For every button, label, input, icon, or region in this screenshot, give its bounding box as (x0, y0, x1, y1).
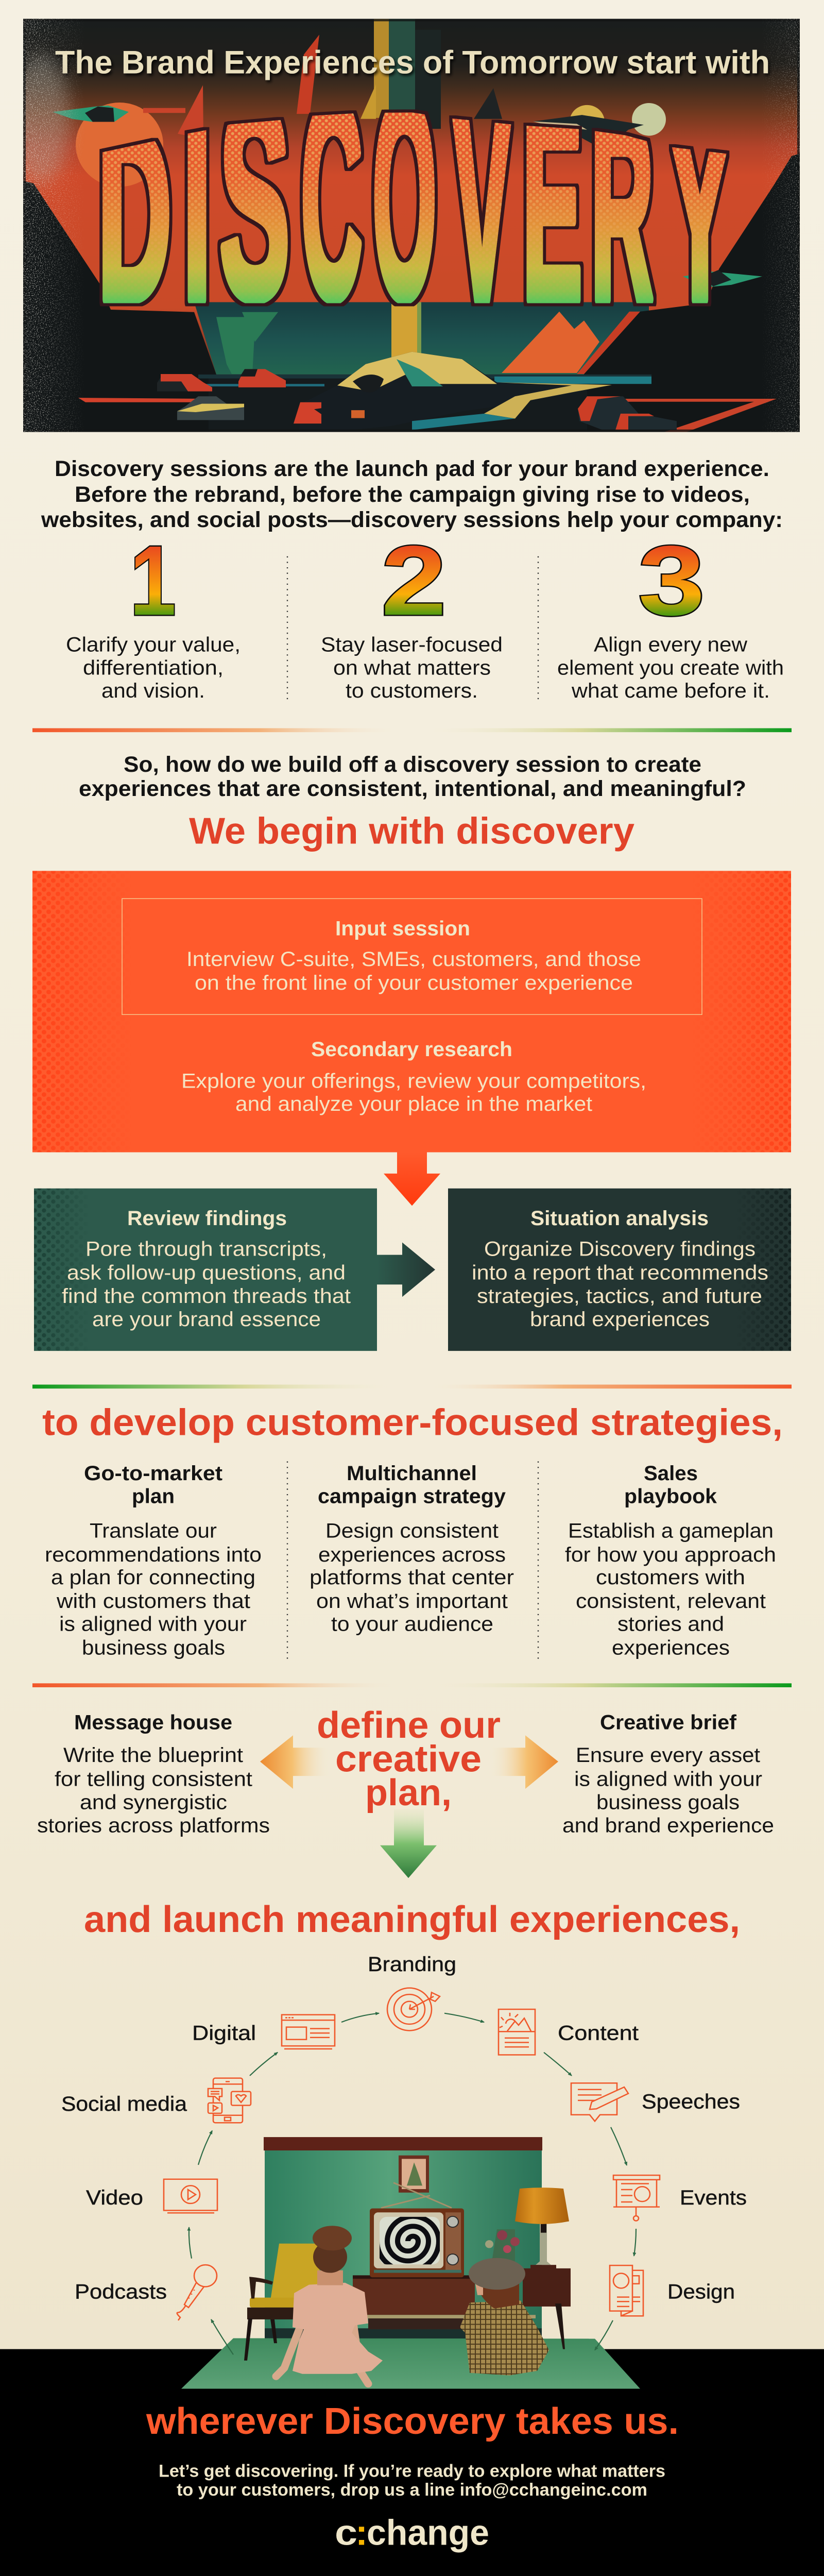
headline: The Brand Experiences of Tomorrow start with: The Brand Experiences of Tomorrow start with (55, 43, 770, 80)
experience cycle labels: Events (680, 2187, 747, 2209)
input session (186, 917, 641, 994)
distressed poster edges (13, 19, 800, 432)
crown molding (264, 2137, 542, 2150)
icon: events presentation board (613, 2175, 660, 2221)
benefit 3 text: element you create with (557, 656, 784, 679)
secondary research: Explore your offerings, review your competitors, (181, 1070, 646, 1092)
three benefits columns (66, 525, 784, 702)
panel: review findings (34, 1189, 377, 1351)
panel: situation analysis (448, 1189, 791, 1351)
multichannel campaign strategy: campaign strategy (318, 1485, 506, 1507)
benefit 1 text: differentiation, (83, 656, 224, 679)
panel: situation analysis: strategies, tactics, and future (477, 1285, 762, 1308)
experience cycle labels: Speeches (642, 2090, 740, 2113)
teal city below the lettering (194, 302, 649, 377)
panel: review findings: Pore through transcripts, (85, 1238, 327, 1260)
secondary research (181, 1038, 646, 1115)
experience cycle labels: Podcasts (75, 2280, 167, 2303)
benefit 1 text: and vision. (101, 680, 205, 702)
go-to-market plan: plan (132, 1485, 175, 1507)
benefit 3 text: what came before it. (571, 680, 770, 702)
benefit 2 text (321, 633, 503, 702)
icon: design brochure (610, 2265, 643, 2316)
flowers (485, 2229, 520, 2261)
living room collage (181, 2137, 640, 2389)
wall base shadow (265, 2328, 542, 2341)
secondary research: Secondary research (311, 1038, 512, 1061)
hero illustration poster (13, 19, 800, 432)
experience cycle labels (61, 1953, 747, 2303)
experience cycle labels: Digital (192, 2022, 256, 2044)
icon: digital browser (282, 2015, 335, 2049)
panel: situation analysis: Situation analysis (530, 1207, 709, 1230)
antenna (381, 2183, 452, 2208)
sun and moons (76, 103, 666, 187)
table lamp (515, 2188, 569, 2269)
heading: define our creative plan: define our (317, 1704, 501, 1746)
experience cycle labels: Social media (61, 2093, 187, 2115)
input session: on the front line of your customer experience (195, 972, 633, 994)
number 3: 3 (638, 525, 705, 636)
creative brief block: and brand experience (562, 1814, 774, 1837)
small spaceships (53, 106, 762, 287)
go-to-market plan: business goals (82, 1636, 225, 1659)
icon: speech with pencil (571, 2083, 628, 2121)
question text: So, how do we build off a discovery session to create (124, 753, 701, 777)
message house block: Write the blueprint (63, 1744, 243, 1767)
vintage television (370, 2209, 464, 2277)
heading: define our creative plan: plan, (365, 1771, 452, 1814)
logo: c:change: c (335, 2513, 357, 2552)
strategy columns (45, 1462, 776, 1659)
intro paragraph: Discovery sessions are the launch pad for your brand experience. (55, 457, 769, 481)
sales playbook: consistent, relevant (576, 1590, 766, 1613)
DISCOVERY gradient lettering: O (372, 39, 437, 359)
panel: review findings: ask follow-up questions, and (67, 1261, 346, 1284)
creative brief block (562, 1711, 774, 1837)
creative brief block: is aligned with your (574, 1768, 762, 1790)
sales playbook: for how you approach (565, 1543, 776, 1566)
intro paragraph: websites, and social posts—discovery sessions help your company: (41, 508, 783, 532)
logo: c:change: : (355, 2513, 368, 2552)
sales playbook (565, 1462, 776, 1659)
sales playbook: Establish a gameplan (568, 1519, 774, 1542)
lower cycle arrows over rug (211, 2319, 613, 2354)
spiral screen (377, 2216, 439, 2271)
go-to-market plan: with customers that (56, 1590, 250, 1613)
sales playbook: playbook (624, 1485, 717, 1507)
girl seated (276, 2226, 383, 2384)
black footer background (0, 2349, 824, 2576)
multichannel campaign strategy: to your audience (331, 1613, 493, 1635)
creative brief block: business goals (596, 1791, 740, 1814)
call to action (159, 2461, 665, 2500)
DISCOVERY gradient lettering: S (219, 47, 290, 357)
benefit 3 text (557, 633, 784, 702)
console cabinet (353, 2268, 571, 2349)
heading: to develop customer-focused strategies: to develop customer-focused strategies, (42, 1401, 783, 1443)
icon: video player (164, 2179, 217, 2213)
intro paragraph (41, 457, 783, 532)
heading: define our creative plan (317, 1704, 501, 1814)
message house block: and synergistic (80, 1791, 227, 1814)
sales playbook: experiences (612, 1636, 730, 1659)
multichannel campaign strategy: platforms that center (310, 1566, 514, 1589)
boy seated (460, 2258, 549, 2376)
heading: define our creative plan: creative (335, 1738, 482, 1780)
message house block (37, 1711, 270, 1837)
go-to-market plan: recommendations into (45, 1543, 262, 1566)
experience cycle labels: Content (558, 2022, 639, 2044)
experience cycle labels: Branding (368, 1953, 456, 1976)
question text (79, 753, 746, 801)
creative brief block: Ensure every asset (576, 1744, 760, 1767)
spaceship car (294, 352, 612, 432)
DISCOVERY gradient lettering (98, 39, 730, 359)
message house block: Message house (74, 1711, 232, 1734)
go-to-market plan (45, 1462, 262, 1659)
icon: social media phone (208, 2078, 251, 2123)
benefit 1 text: Clarify your value, (66, 633, 241, 656)
benefit 2 text: on what matters (333, 656, 491, 679)
sales playbook: stories and (617, 1613, 724, 1635)
question text: experiences that are consistent, intentional, and meaningful? (79, 777, 746, 801)
panel: review findings: are your brand essence (92, 1308, 321, 1331)
logo: c:change: change (367, 2513, 489, 2552)
panel: situation analysis: brand experiences (530, 1308, 710, 1331)
input session: Interview C-suite, SMEs, customers, and those (186, 948, 641, 971)
wall (265, 2150, 542, 2341)
panel: situation analysis: into a report that recommends (472, 1261, 768, 1284)
arrow: plan down to launch (380, 1809, 437, 1878)
benefit 2 text: Stay laser-focused (321, 633, 503, 656)
DISCOVERY gradient lettering: I (183, 62, 211, 355)
creative brief block: Creative brief (600, 1711, 737, 1734)
icon: branding target (387, 1988, 440, 2030)
road and red lines (78, 375, 777, 432)
go-to-market plan: a plan for connecting (51, 1566, 255, 1589)
DISCOVERY gradient lettering: D (98, 77, 171, 351)
secondary research: and analyze your place in the market (235, 1092, 592, 1115)
grass rug (181, 2338, 640, 2389)
cycle arrows (189, 2013, 636, 2259)
panel: discovery inputs (32, 871, 791, 1153)
number 2: 2 (381, 525, 447, 636)
sales playbook: Sales (644, 1462, 698, 1485)
experience cycle labels: Video (86, 2187, 143, 2209)
heading: We begin with discovery: We begin with discovery (189, 810, 634, 852)
small cars (157, 369, 677, 430)
yellow chair (244, 2244, 320, 2361)
intro paragraph: Before the rebrand, before the campaign giving rise to videos, (75, 483, 750, 507)
orange peaks and red edge (502, 312, 640, 374)
go-to-market plan: is aligned with your (59, 1613, 247, 1635)
arrow: plan to message house (260, 1735, 331, 1789)
heading: and launch meaningful experiences: and launch meaningful experiences, (84, 1898, 740, 1940)
benefit 2 text: to customers. (346, 680, 478, 702)
call to action: Let’s get discovering. If you’re ready to explore what matters (159, 2461, 665, 2481)
DISCOVERY gradient lettering: R (591, 69, 654, 354)
sales playbook: customers with (596, 1566, 745, 1589)
framed picture (399, 2156, 429, 2193)
arrow: inputs down to findings (384, 1153, 440, 1206)
input session: Input session (335, 917, 470, 940)
multichannel campaign strategy: experiences across (318, 1543, 506, 1566)
go-to-market plan: Go-to-market (84, 1462, 222, 1485)
message house block: for telling consistent (55, 1768, 252, 1790)
DISCOVERY gradient lettering: C (301, 40, 363, 358)
panel: review findings: Review findings (127, 1207, 287, 1230)
benefit 3 text: Align every new (594, 633, 748, 656)
message house block: stories across platforms (37, 1814, 270, 1837)
number 1: 1 (130, 525, 176, 636)
call to action: to your customers, drop us a line info@cchangeinc.com (177, 2480, 647, 2500)
DISCOVERY gradient lettering: E (522, 58, 582, 356)
arrow: findings to analysis (377, 1243, 435, 1297)
arrow: plan to creative brief (489, 1735, 558, 1789)
multichannel campaign strategy: Multichannel (347, 1462, 477, 1485)
icon: podcast microphone (177, 2265, 217, 2320)
dark mountains (23, 154, 800, 432)
multichannel campaign strategy: on what’s important (316, 1590, 508, 1613)
icon: content document (499, 2009, 535, 2055)
benefit 1 text (66, 633, 241, 702)
panel: review findings: find the common threads that (62, 1285, 351, 1308)
go-to-market plan: Translate our (90, 1519, 217, 1542)
DISCOVERY gradient lettering: V (452, 49, 512, 358)
closing heading: wherever Discovery takes us: wherever Discovery takes us. (146, 2400, 679, 2442)
multichannel campaign strategy: Design consistent (325, 1519, 499, 1542)
multichannel campaign strategy (310, 1462, 514, 1635)
experience cycle labels: Design (667, 2280, 735, 2303)
panel: situation analysis: Organize Discovery findings (484, 1238, 756, 1260)
city towers and beams (143, 19, 502, 139)
